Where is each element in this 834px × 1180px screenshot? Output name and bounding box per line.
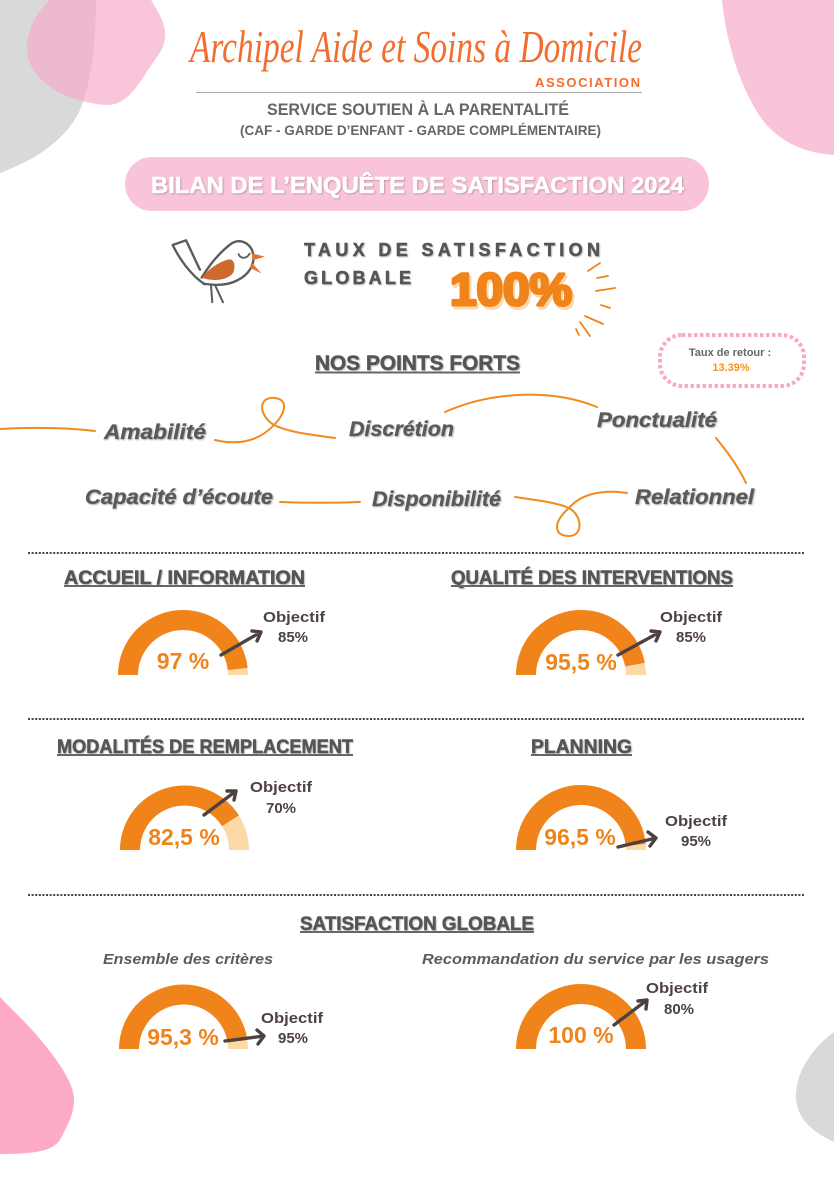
callout: taux de retour: 13.39% (712, 362, 750, 374)
arrow to objective (225, 1030, 264, 1044)
strength: Amabilité: Amabilité (103, 421, 206, 444)
objective (660, 609, 723, 646)
objective: 85% (676, 629, 706, 646)
objective: 70% (266, 800, 296, 817)
heading: ACCUEIL / INFORMATION (64, 568, 305, 589)
callout: taux de retour: Taux de retour : (689, 347, 771, 359)
arrow to objective (221, 631, 261, 655)
heading: PLANNING (531, 737, 632, 758)
banner (125, 157, 709, 211)
arrow to objective (204, 791, 236, 815)
gauge 82,5 %: 82,5 % (148, 824, 220, 850)
strengths connected by curves (0, 395, 755, 536)
heading: MODALITÉS DE REMPLACEMENT (57, 736, 353, 758)
gauge 82,5 % (130, 795, 239, 850)
blob: bottom-right grey (796, 1032, 834, 1142)
gauge 96,5 %: 96,5 % (544, 824, 616, 850)
objective: 80% (664, 1001, 694, 1018)
gauge 95,3 %: 95,3 % (147, 1024, 219, 1050)
objective (263, 609, 326, 646)
objective: Objectif (261, 1010, 324, 1027)
satisfaction label (304, 240, 600, 288)
arrow to objective (618, 631, 660, 655)
gauge 100 %: 100 % (548, 1022, 614, 1048)
strength: Disponibilité: Disponibilité (372, 488, 501, 511)
strength: Capacité d'écoute: Capacité d’écoute (85, 486, 273, 509)
satisfaction label: TAUX DE SATISFACTION (304, 240, 600, 260)
objective: 95% (278, 1030, 308, 1047)
blob: top-left pink (27, 0, 165, 105)
objective: Objectif (646, 980, 709, 997)
subheading: Recommandation du service par les usagers (422, 951, 769, 968)
objective: 95% (681, 833, 711, 850)
section heading: nos points forts: NOS POINTS FORTS (315, 352, 520, 375)
gauge 97 %: 97 % (157, 648, 209, 674)
panel: ensemble des critères (103, 951, 324, 1050)
satisfaction value 100%: 100% (450, 264, 572, 315)
blob: top-left grey (0, 0, 96, 173)
satisfaction label: GLOBALE (304, 268, 411, 288)
satisfaction value 100%: 100% (452, 267, 574, 318)
gauge 95,5 %: 95,5 % (545, 649, 617, 675)
panel: qualité des interventions (451, 567, 733, 675)
objective: Objectif (263, 609, 326, 626)
strength: Relationnel: Relationnel (635, 486, 755, 509)
panel: modalités de remplacement (57, 736, 353, 850)
panel: planning (526, 737, 728, 850)
icon: burst rays (576, 263, 615, 336)
objective (261, 1010, 324, 1047)
objective: 85% (278, 629, 308, 646)
strength: Ponctualité: Ponctualité (597, 409, 717, 432)
gauge 95,3 % (129, 994, 238, 1050)
gauge 97 % (128, 620, 238, 675)
panel: recommandation du service (422, 951, 769, 1049)
section heading: satisfaction globale: SATISFACTION GLOBALE (300, 914, 534, 935)
panel: accueil / information (64, 568, 326, 675)
service heading: SERVICE SOUTIEN À LA PARENTALITÉ (267, 100, 569, 119)
connector curves (0, 395, 746, 536)
icon: bird (173, 240, 265, 303)
gauge 96,5 % (526, 795, 636, 850)
blob: bottom-left pink (0, 997, 74, 1154)
objective: Objectif (660, 609, 723, 626)
objective (665, 813, 728, 850)
objective (646, 980, 709, 1018)
logo title: Archipel Aide et Soins à Domicile (188, 21, 642, 72)
banner: BILAN DE L’ENQUÊTE DE SATISFACTION 2024 (151, 171, 684, 198)
objective (250, 779, 313, 817)
logo title: ASSOCIATION (535, 75, 640, 90)
gauge 95,5 % (526, 620, 636, 675)
objective: Objectif (665, 813, 728, 830)
service subheading: (CAF - GARDE D’ENFANT - GARDE COMPLÉMENTAIRE) (240, 122, 601, 138)
objective: Objectif (250, 779, 313, 796)
arrow to objective (614, 1000, 647, 1025)
blob: top-right pink (722, 0, 834, 155)
gauge 100 % (526, 994, 636, 1049)
subheading: Ensemble des critères (103, 951, 273, 968)
logo title (188, 21, 642, 92)
heading: QUALITÉ DES INTERVENTIONS (451, 567, 733, 589)
strength: Discrétion: Discrétion (349, 418, 454, 441)
callout: taux de retour (660, 335, 804, 386)
arrow to objective (618, 832, 656, 847)
